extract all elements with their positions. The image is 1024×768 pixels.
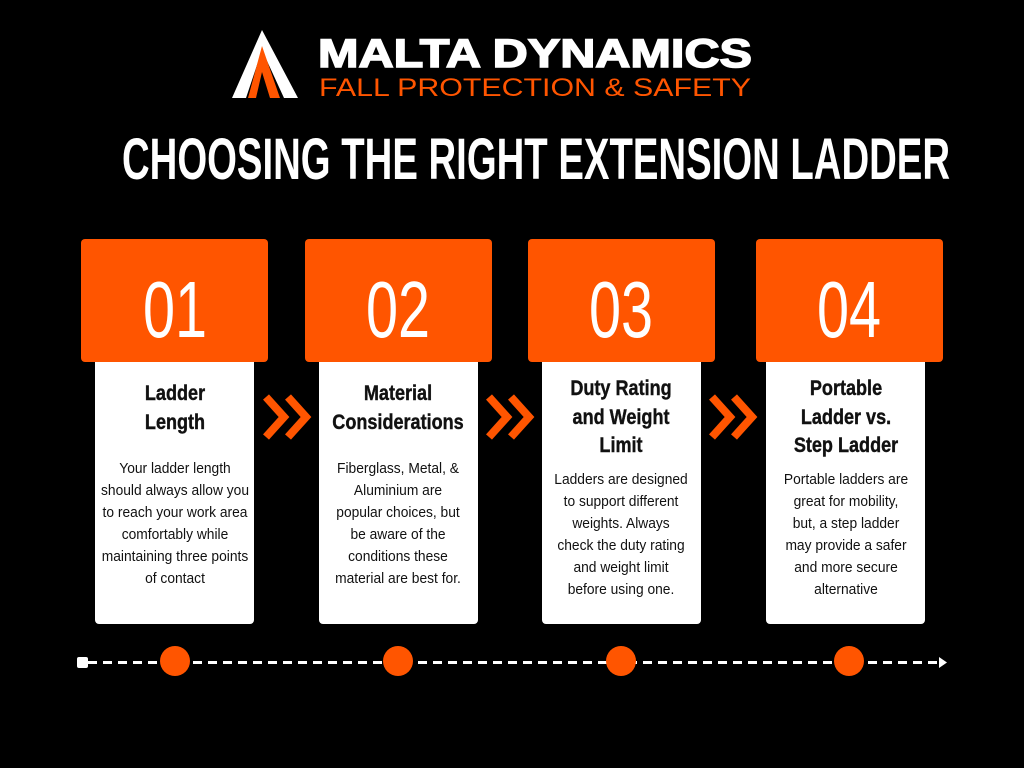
panel: step 4: Step Ladder <box>794 434 899 457</box>
panel: step 3: Duty Rating <box>570 377 672 400</box>
panel: step 3: weights. Always <box>571 516 670 532</box>
panel: step 3: Ladders are designed <box>554 472 688 488</box>
panel: step 2: Considerations <box>332 411 464 434</box>
panel: step 2: 02 <box>366 265 430 354</box>
panel: step 3: to support different <box>564 494 678 510</box>
panel: step 2: Fiberglass, Metal, & <box>337 461 459 477</box>
panel: step 4: but, a step ladder <box>793 516 899 532</box>
arrow: chevrons 2-3 <box>489 397 529 437</box>
panel: step 3: and Weight <box>573 406 670 429</box>
timeline <box>77 646 947 676</box>
panel: step 4: may provide a safer <box>785 538 907 554</box>
panel: step 2: be aware of the <box>350 527 446 543</box>
panel: step 2: popular choices, but <box>336 505 460 521</box>
panel: step 3: before using one. <box>568 582 674 598</box>
panel: step 2: material are best for. <box>335 571 461 587</box>
panel: step 1: 01 <box>143 265 207 354</box>
panel: step 2: conditions these <box>348 549 448 565</box>
panel: step 3: 03 <box>589 265 653 354</box>
panel: step 1: should always allow you <box>101 483 249 499</box>
panel: step 2: Material <box>364 382 432 405</box>
panel: step 4: and more secure <box>794 560 898 576</box>
arrow: chevrons 1-2 <box>266 397 306 437</box>
panel: step 2: Aluminium are <box>354 483 442 499</box>
panel: step 1: comfortably while <box>122 527 228 543</box>
panel: step 4: Portable <box>810 377 882 400</box>
logo <box>232 30 752 102</box>
panel: step 4: Ladder vs. <box>801 406 891 429</box>
icon: logo triangle <box>232 30 298 98</box>
panel: step 3: and weight limit <box>573 560 669 576</box>
panel: step 3: check the duty rating <box>557 538 685 554</box>
logo tagline: FALL PROTECTION & SAFETY <box>319 74 751 102</box>
panel: step 4: alternative <box>814 582 878 598</box>
panel: step 4: Portable ladders are <box>784 472 908 488</box>
panel: step 1: Ladder <box>145 382 205 405</box>
panel: step 4: great for mobility, <box>794 494 898 510</box>
panel: step 4 <box>756 239 943 624</box>
panel: step 1: Length <box>145 411 205 434</box>
panel: step 1: to reach your work area <box>103 505 248 521</box>
panel: step 1: Your ladder length <box>119 461 231 477</box>
panel: step 1: maintaining three points <box>102 549 248 565</box>
panel: step 2 <box>305 239 492 624</box>
panel: step 4: 04 <box>817 265 881 354</box>
logo wordmark: MALTA DYNAMICS <box>318 32 752 76</box>
panel: step 1: of contact <box>145 571 205 587</box>
panel: step 3: Limit <box>599 434 643 457</box>
panel: step 3 <box>528 239 715 624</box>
panel: step 1 <box>81 239 268 624</box>
arrow: chevrons 3-4 <box>712 397 752 437</box>
